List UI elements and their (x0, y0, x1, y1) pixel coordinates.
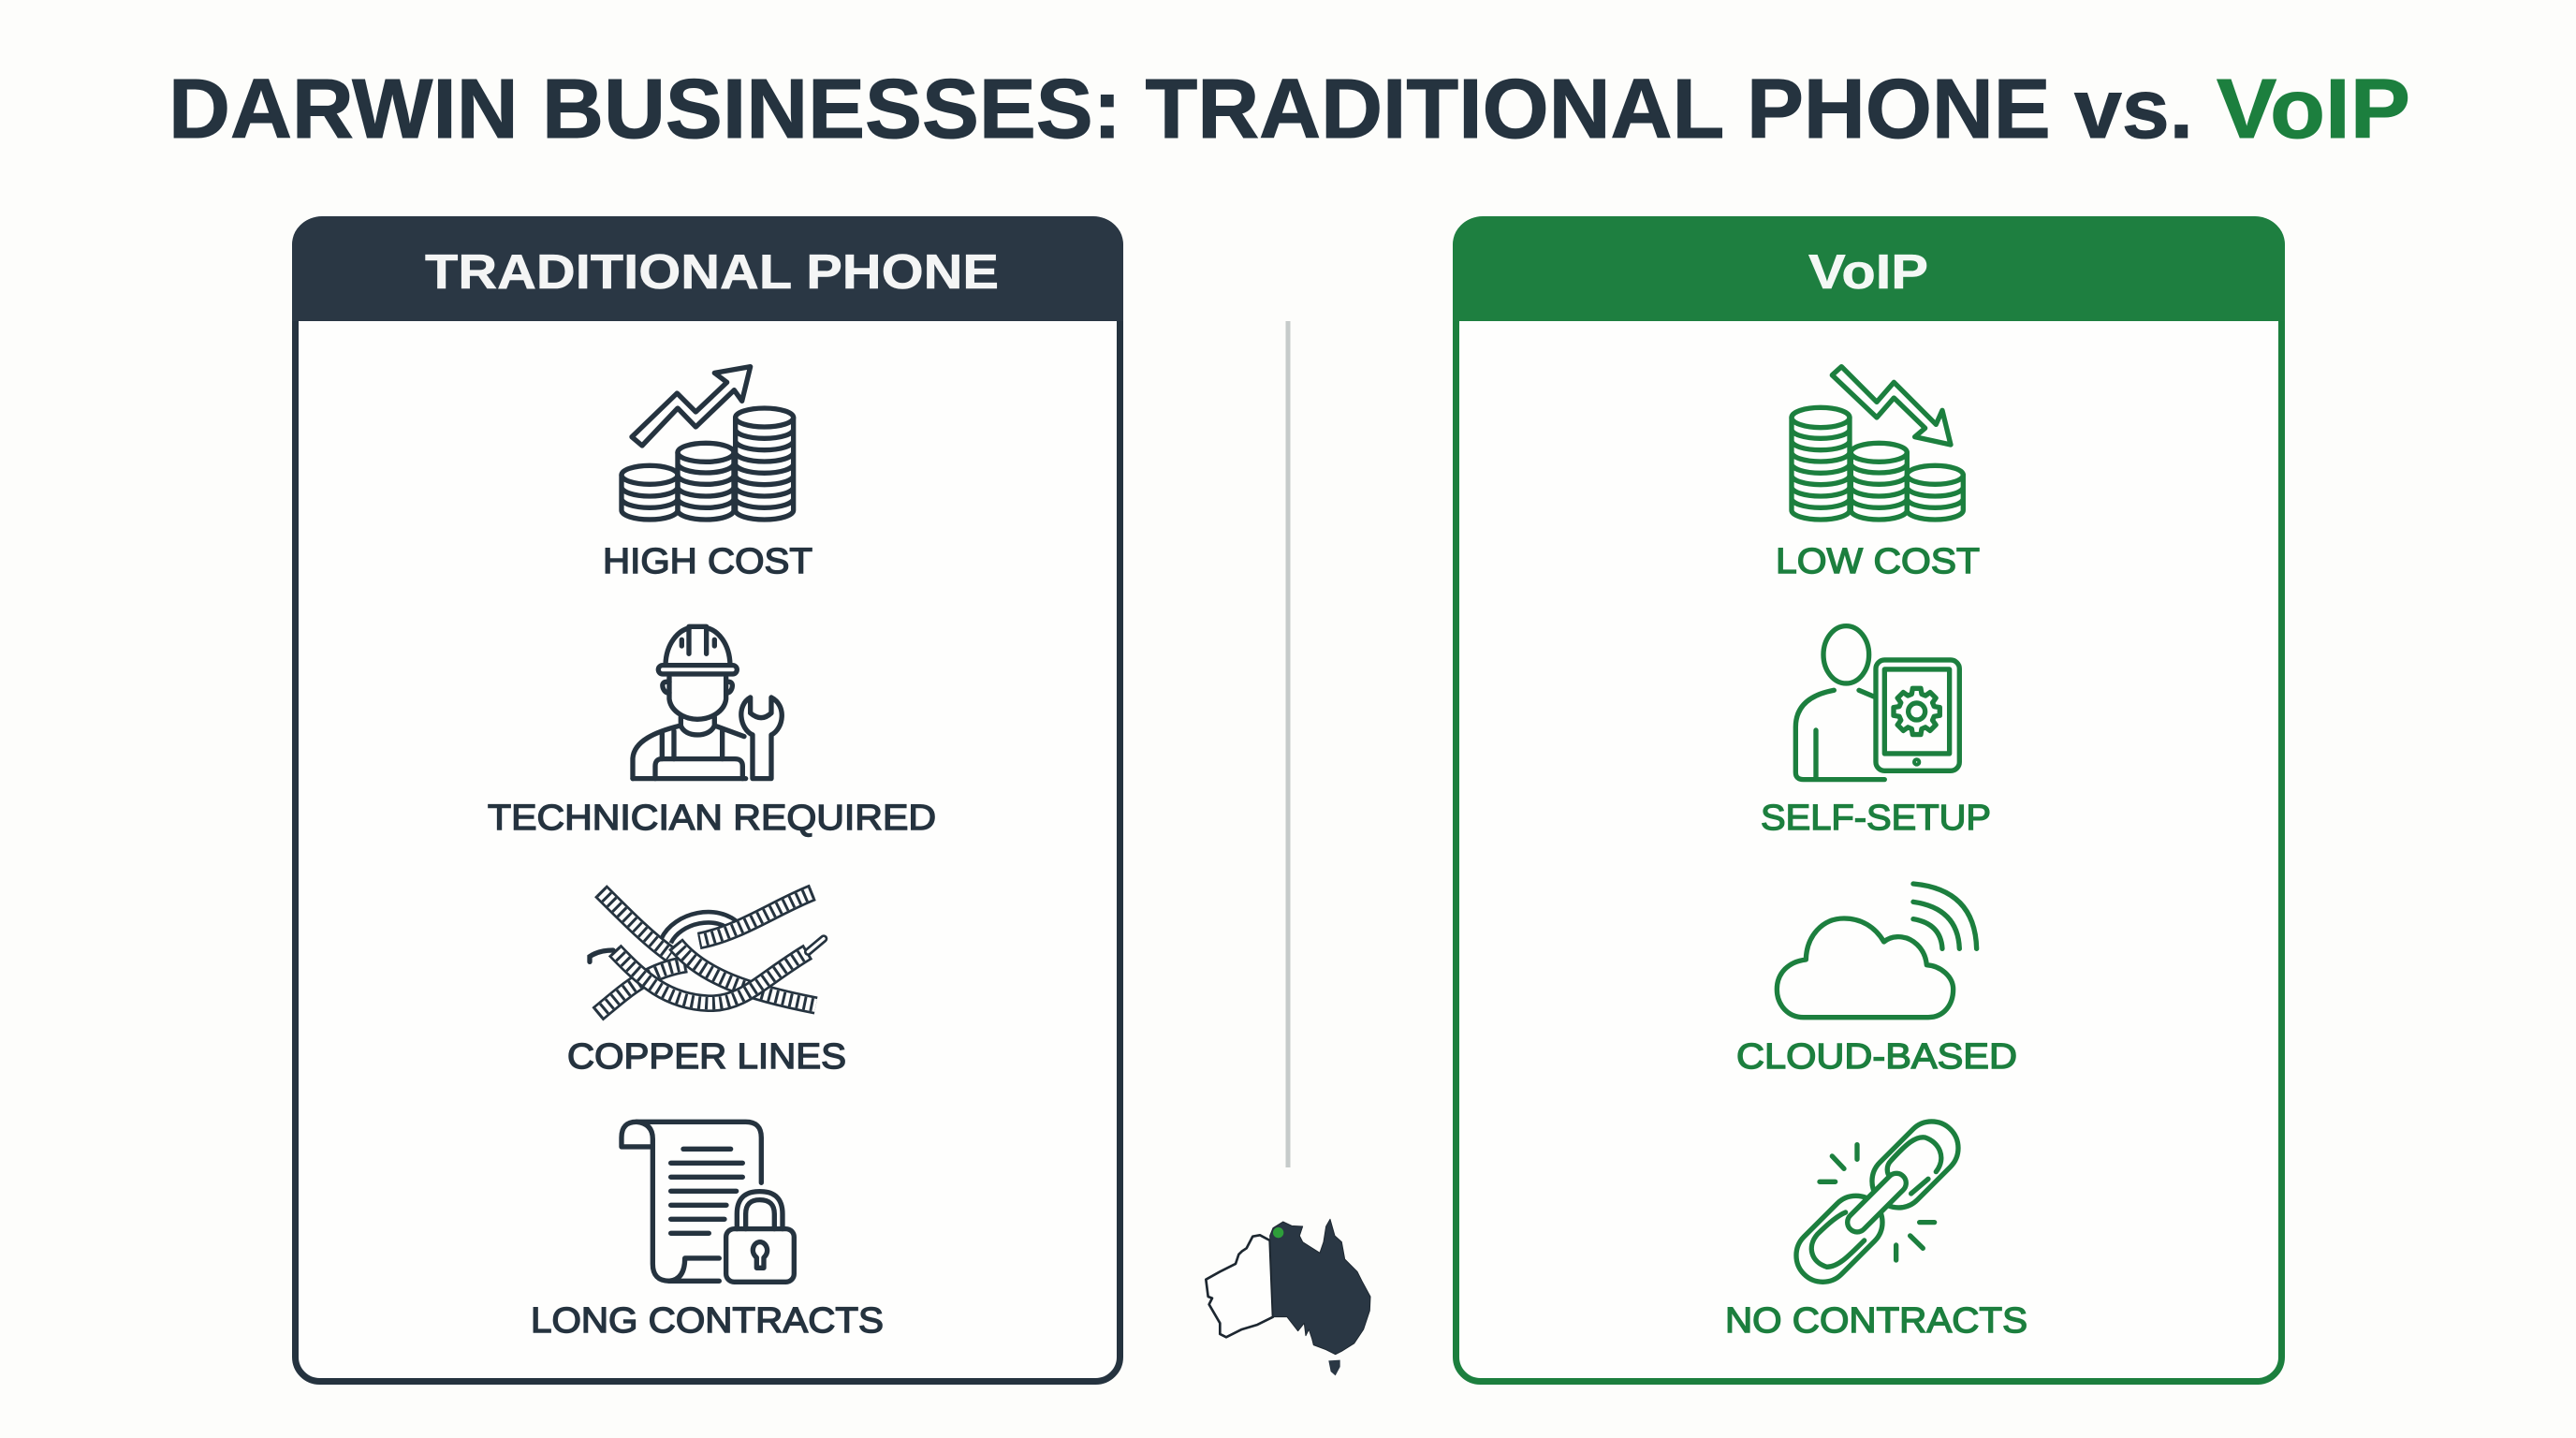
icon: falling coins (1792, 367, 1963, 520)
label: cloud-based: CLOUD-BASED (1736, 1037, 2017, 1077)
icon: cloud with signal (1777, 884, 1977, 1018)
label: self-setup: SELF-SETUP (1761, 799, 1991, 838)
icon: australia map (1206, 1219, 1370, 1375)
icon: technician (633, 626, 782, 779)
icon: rising coins (622, 367, 794, 520)
heading: traditional phone: TRADITIONAL PHONE (425, 245, 999, 300)
panel header: traditional (292, 216, 1123, 321)
label: long contracts: LONG CONTRACTS (531, 1301, 884, 1341)
label: low cost: LOW COST (1776, 542, 1980, 581)
divider (1286, 321, 1290, 1167)
icon: broken chain (1785, 1110, 1969, 1293)
icon: self-setup (1795, 626, 1959, 780)
panel: voip (1453, 216, 2285, 1382)
label: copper lines: COPPER LINES (567, 1037, 846, 1077)
panel frame: traditional (296, 221, 1120, 1382)
label: high cost: HIGH COST (603, 542, 812, 581)
title: DARWIN BUSINESSES: TRADITIONAL PHONE vs. (168, 63, 2193, 156)
icon: tangled copper lines (590, 891, 824, 1014)
heading: voip: VoIP (1808, 245, 1928, 300)
panel header: voip (1453, 216, 2285, 321)
title: VoIP (2217, 63, 2410, 156)
label: no contracts: NO CONTRACTS (1725, 1301, 2027, 1341)
panel: traditional phone (292, 216, 1123, 1382)
label: technician required: TECHNICIAN REQUIRED (488, 799, 936, 838)
panel frame: voip (1456, 221, 2282, 1382)
icon: contract with lock (622, 1122, 794, 1282)
